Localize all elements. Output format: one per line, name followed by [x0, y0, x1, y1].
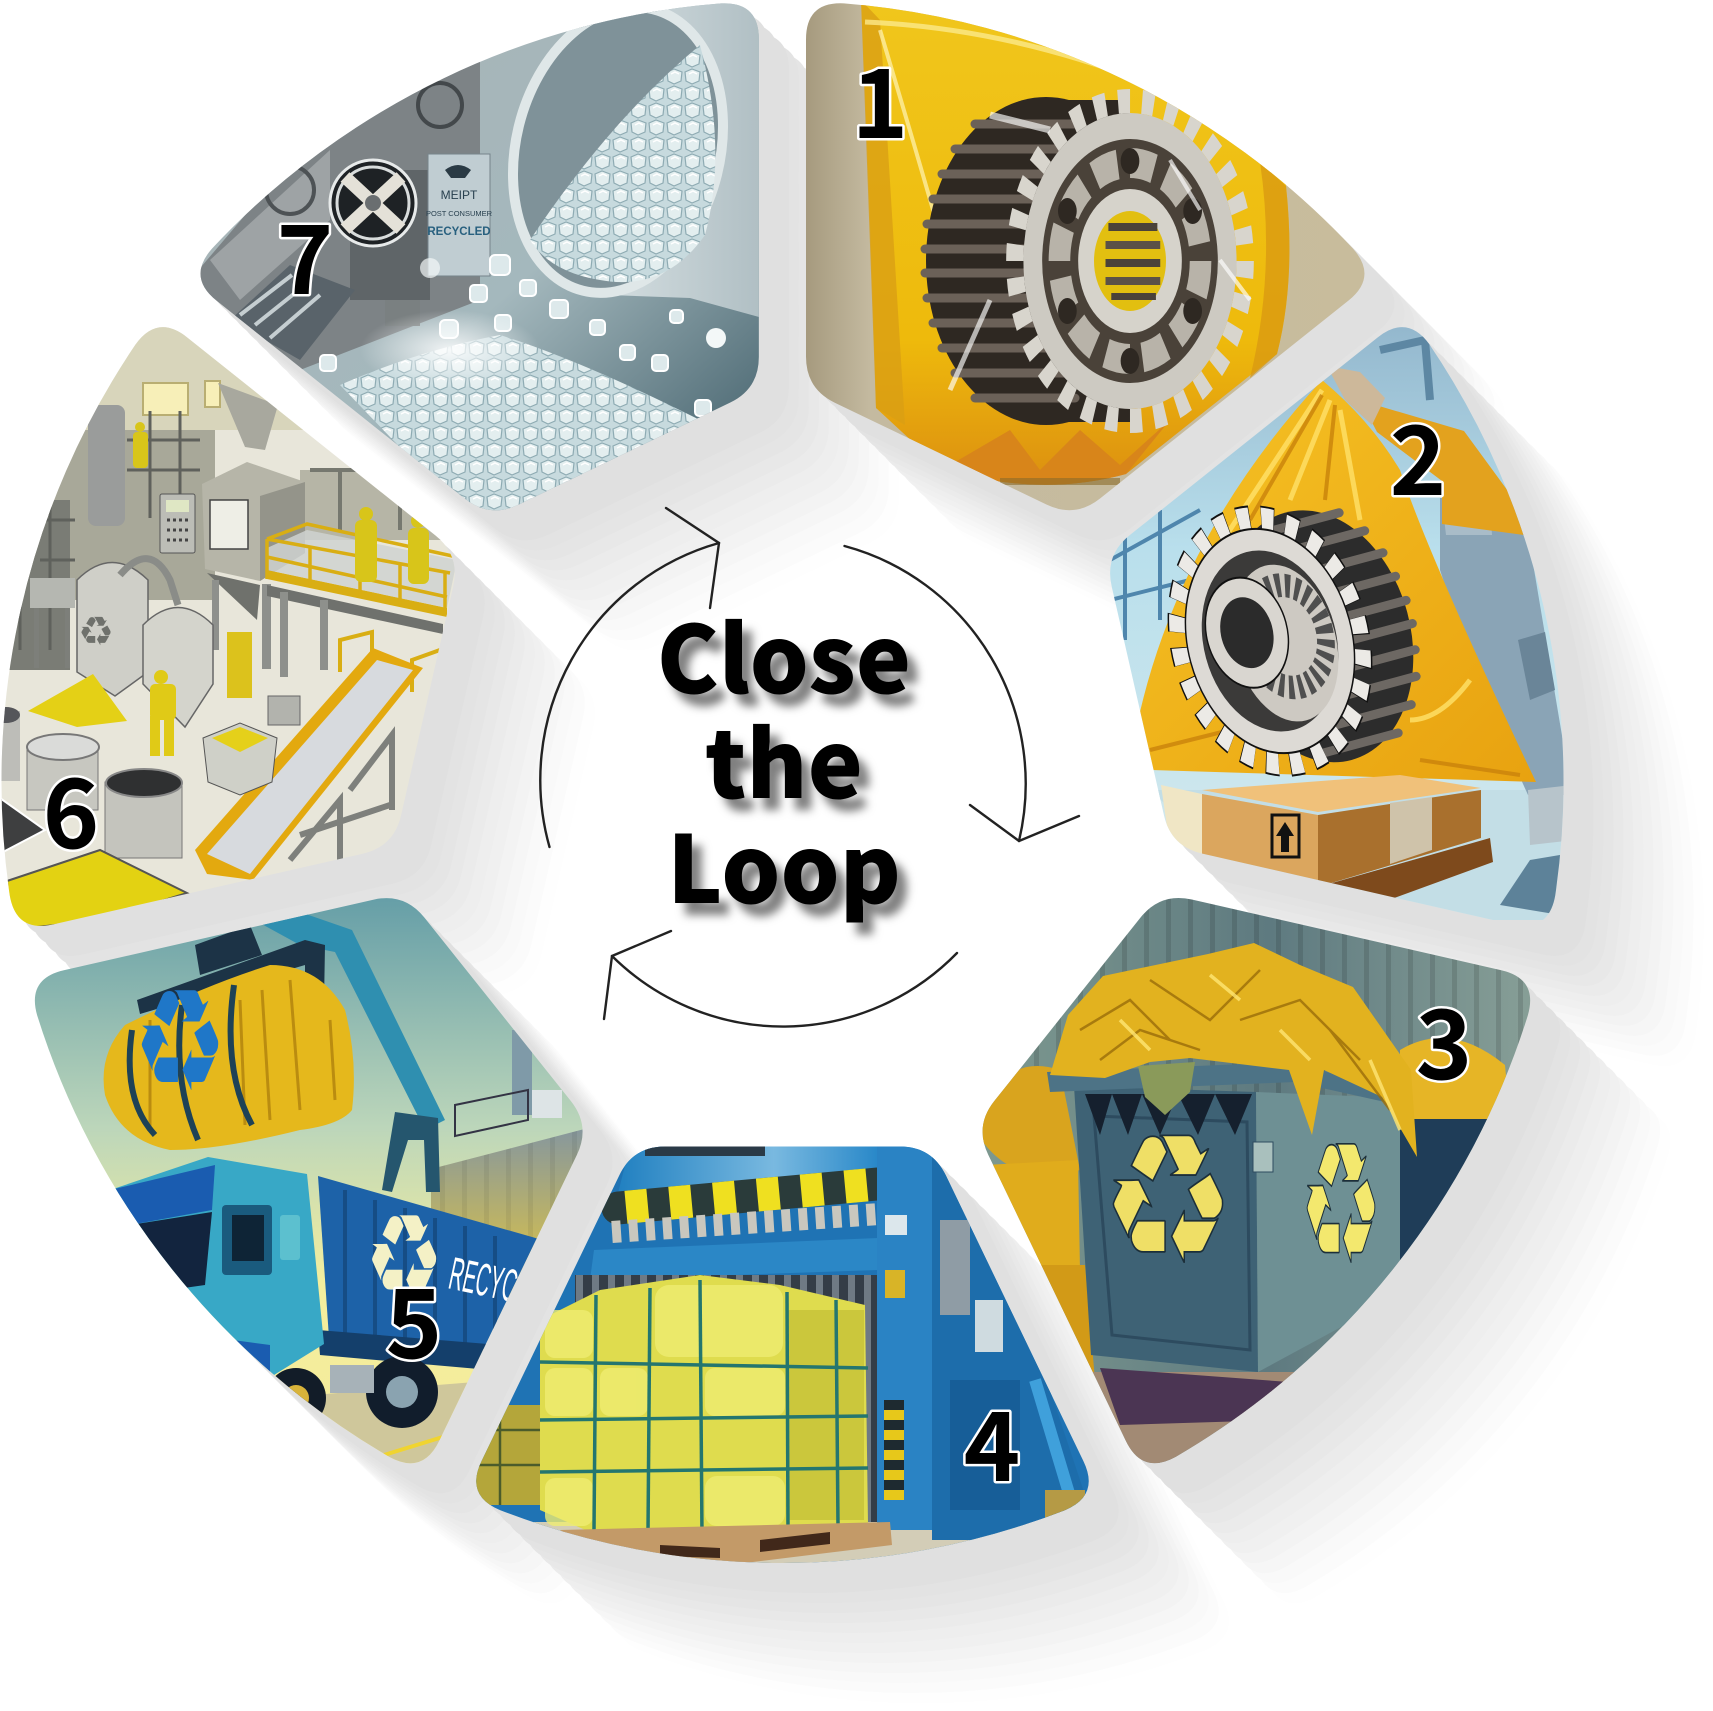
yellow sack	[1136, 380, 1536, 782]
sign: post consumer recycled: POST CONSUMER	[426, 209, 493, 218]
overflowing yellow plastic	[1050, 943, 1417, 1157]
grey box	[268, 696, 300, 725]
yellow pellet pile	[28, 674, 127, 727]
road and wheels	[250, 1356, 500, 1500]
pallet	[560, 1522, 892, 1566]
gear face	[1015, 101, 1245, 421]
distant bales	[470, 1405, 540, 1505]
warehouse windows	[1112, 336, 1434, 640]
truck container	[318, 1176, 560, 1370]
transparent tube with pellets	[484, 0, 770, 320]
truck container: RECYCL	[445, 1248, 532, 1314]
circular arrow: bottom	[604, 931, 957, 1027]
drums	[0, 707, 182, 858]
dark vertical bars	[575, 1275, 885, 1525]
panel 2: worker wrapping a gear in a yellow sack	[1110, 327, 1564, 920]
gear side teeth	[920, 97, 1130, 425]
recycling symbols: ♻	[1101, 1096, 1235, 1305]
crane arm	[258, 912, 445, 1192]
machinery background	[190, 40, 480, 370]
film highlights	[950, 115, 1250, 390]
machine top	[615, 1146, 880, 1205]
control panel	[160, 494, 195, 553]
step numbers: 1	[852, 27, 908, 166]
bin of yellow pellets	[7, 850, 187, 930]
panel 6: recycling plant with silos, walkway and conveyor	[0, 300, 480, 940]
panel 1: gear sealed in a yellow plastic bag	[800, 0, 1390, 530]
sparkles	[360, 258, 726, 390]
yellow walkway	[267, 524, 457, 677]
step numbers: 3	[1416, 968, 1472, 1107]
yellow bale stack	[540, 1275, 868, 1538]
step numbers: 4	[964, 1370, 1020, 1509]
second bin	[1400, 1119, 1490, 1270]
recycling symbols: ♻	[1299, 1107, 1383, 1303]
cardboard box and pallet	[1161, 775, 1493, 905]
step numbers: 2	[1390, 384, 1446, 523]
pellet pile	[340, 335, 700, 520]
teeth and cross beam	[612, 1214, 880, 1232]
hanging bale: ♻	[133, 959, 227, 1124]
step numbers	[43, 27, 1472, 1509]
gear side teeth	[1257, 508, 1421, 762]
machine right side	[877, 1146, 1100, 1540]
storage tanks: ♻	[78, 609, 114, 655]
truck container: ♻	[365, 1191, 443, 1324]
bin body	[1047, 1062, 1400, 1372]
panel 5: crane loading a bale on a recycling truck	[20, 880, 600, 1500]
panel 7: clear recycled pellets pouring from a tube	[190, 0, 770, 530]
falling pellets	[320, 255, 711, 416]
conveyor	[195, 632, 440, 880]
sign: post consumer recycled: RECYCLED	[427, 226, 491, 238]
tall silo	[88, 405, 125, 526]
ground	[1092, 1372, 1294, 1464]
bin of black pellets	[0, 798, 45, 852]
gear face	[1168, 505, 1372, 777]
title: the	[705, 690, 863, 825]
yellow cabinet	[227, 632, 252, 698]
crane lifting frame	[137, 925, 325, 1118]
panel 3: recycling bin overflowing with yellow plastic	[982, 898, 1530, 1464]
step numbers: 7	[277, 183, 333, 322]
step numbers: 6	[43, 737, 99, 876]
title: Close	[657, 585, 911, 720]
title	[657, 585, 924, 941]
workers on walkway	[355, 507, 429, 584]
step numbers: 5	[386, 1247, 442, 1386]
yellow bin	[203, 723, 277, 795]
yellow plastic bag	[861, 0, 1289, 485]
yellow bags background	[975, 1038, 1510, 1400]
circular arrow: top right	[844, 546, 1079, 841]
floor	[1150, 790, 1590, 920]
storage tanks	[30, 559, 213, 727]
circular arrow: left	[540, 508, 719, 847]
worker on floor	[150, 670, 176, 756]
hazard stripe roller	[618, 1184, 877, 1208]
wheel	[330, 160, 416, 246]
recycling symbols	[1112, 1134, 1376, 1263]
ground	[460, 1522, 1110, 1582]
factory building	[431, 1030, 600, 1300]
worker on upper level	[133, 422, 148, 468]
hanging bale	[104, 959, 354, 1150]
hopper tower	[202, 383, 305, 669]
panel 4: baling machine with yellow plastic bales	[476, 1146, 1089, 1563]
title: Loop	[667, 795, 901, 930]
truck cab	[110, 1157, 324, 1385]
worker	[1327, 366, 1575, 845]
sign: post consumer recycled	[426, 154, 493, 276]
back wall with windows	[0, 320, 450, 670]
sign: post consumer recycled: MEIPT	[441, 188, 478, 202]
